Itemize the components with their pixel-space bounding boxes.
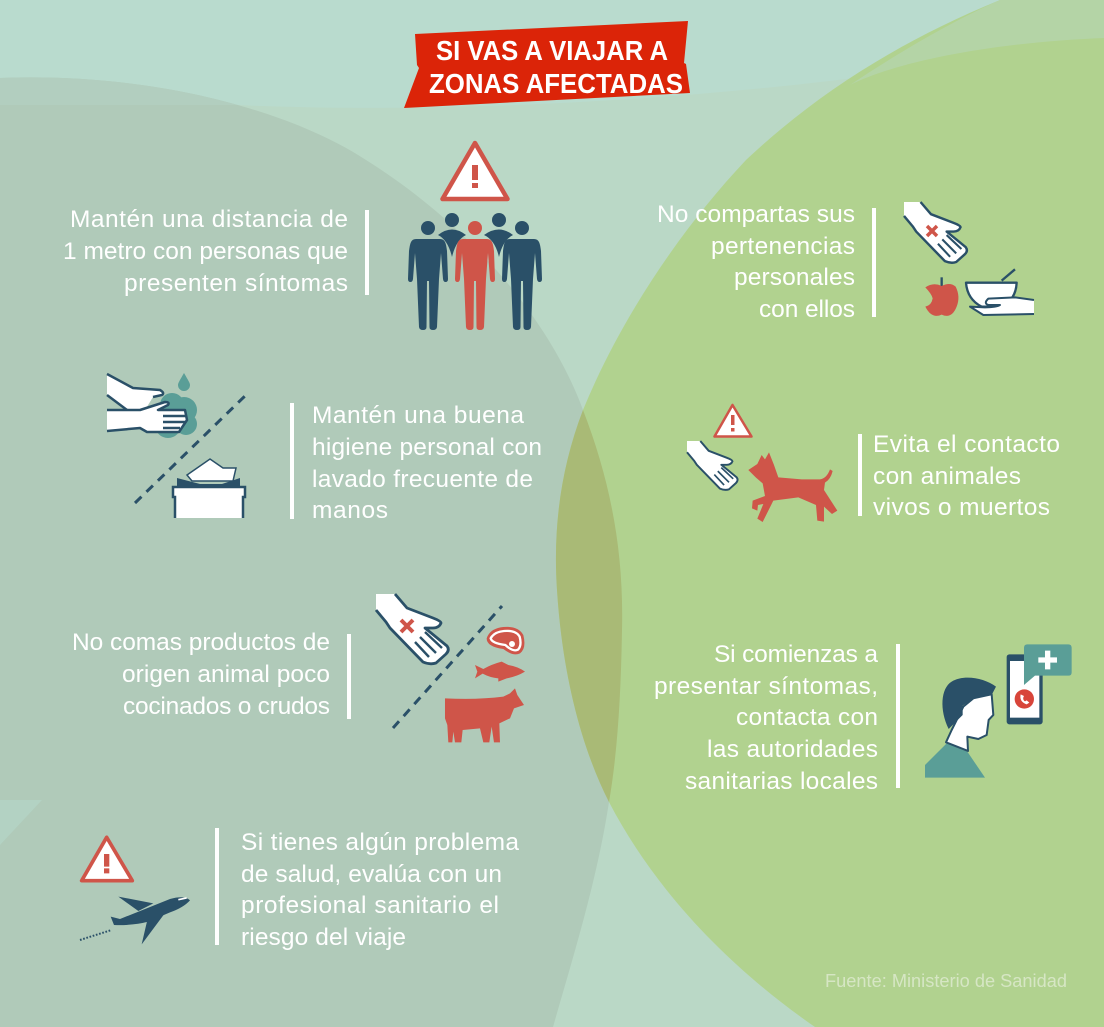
icon: hand washing and tissue box xyxy=(107,373,248,518)
source note: Fuente: Ministerio de Sanidad xyxy=(825,971,1067,991)
item: animals text xyxy=(858,431,1060,521)
icon: person with phone xyxy=(925,644,1072,778)
item: belongings text: con ellos xyxy=(759,296,855,323)
item: animals text: con animales xyxy=(873,463,1021,490)
item: contact authorities text: presentar síntomas, xyxy=(654,673,878,700)
item: hygiene text: Mantén una buena xyxy=(312,402,524,429)
item: health check text: profesional sanitario el xyxy=(241,892,499,919)
item: health check text: riesgo del viaje xyxy=(241,924,406,951)
title banner: ZONAS AFECTADAS xyxy=(429,68,683,99)
item: keep distance text: 1 metro con personas que xyxy=(63,238,348,265)
item: hygiene text: higiene personal con xyxy=(312,434,542,461)
item: belongings text: pertenencias xyxy=(711,233,855,260)
item: keep distance text xyxy=(63,206,369,297)
item: undercooked food text: cocinados o crudos xyxy=(123,693,330,720)
item: keep distance text: presenten síntomas xyxy=(124,270,348,297)
item: keep distance text: Mantén una distancia de xyxy=(70,206,348,233)
title banner: SI VAS A VIAJAR A xyxy=(436,35,668,66)
item: contact authorities text: Si comienzas a xyxy=(714,641,878,668)
item: contact authorities text: contacta con xyxy=(736,704,878,731)
item: animals text: Evita el contacto xyxy=(873,431,1060,458)
item: contact authorities text: las autoridades xyxy=(707,736,878,763)
item: animals text: vivos o muertos xyxy=(873,494,1050,521)
icon: hand, meat, fish and cow xyxy=(376,594,525,742)
item: undercooked food text xyxy=(72,629,351,720)
icon: warning over group of people xyxy=(408,143,542,330)
item: hygiene text xyxy=(290,402,542,524)
icon: hand, apple and bowl xyxy=(904,202,1034,316)
item: belongings text: No compartas sus xyxy=(657,201,855,228)
item: hygiene text: lavado frecuente de xyxy=(312,466,533,493)
item: health check text xyxy=(215,828,519,951)
item: health check text: de salud, evalúa con un xyxy=(241,861,502,888)
item: contact authorities text: sanitarias locales xyxy=(685,768,878,795)
item: contact authorities text xyxy=(654,641,900,795)
item: health check text: Si tienes algún problema xyxy=(241,829,519,856)
item: undercooked food text: No comas productos de xyxy=(72,629,330,656)
title banner xyxy=(404,21,690,108)
icon: warning and airplane xyxy=(80,837,190,944)
item: belongings text xyxy=(657,201,876,323)
item: belongings text: personales xyxy=(734,264,855,291)
item: undercooked food text: origen animal poco xyxy=(122,661,330,688)
item: hygiene text: manos xyxy=(312,497,388,524)
icon: warning, hand and dog xyxy=(687,405,837,522)
